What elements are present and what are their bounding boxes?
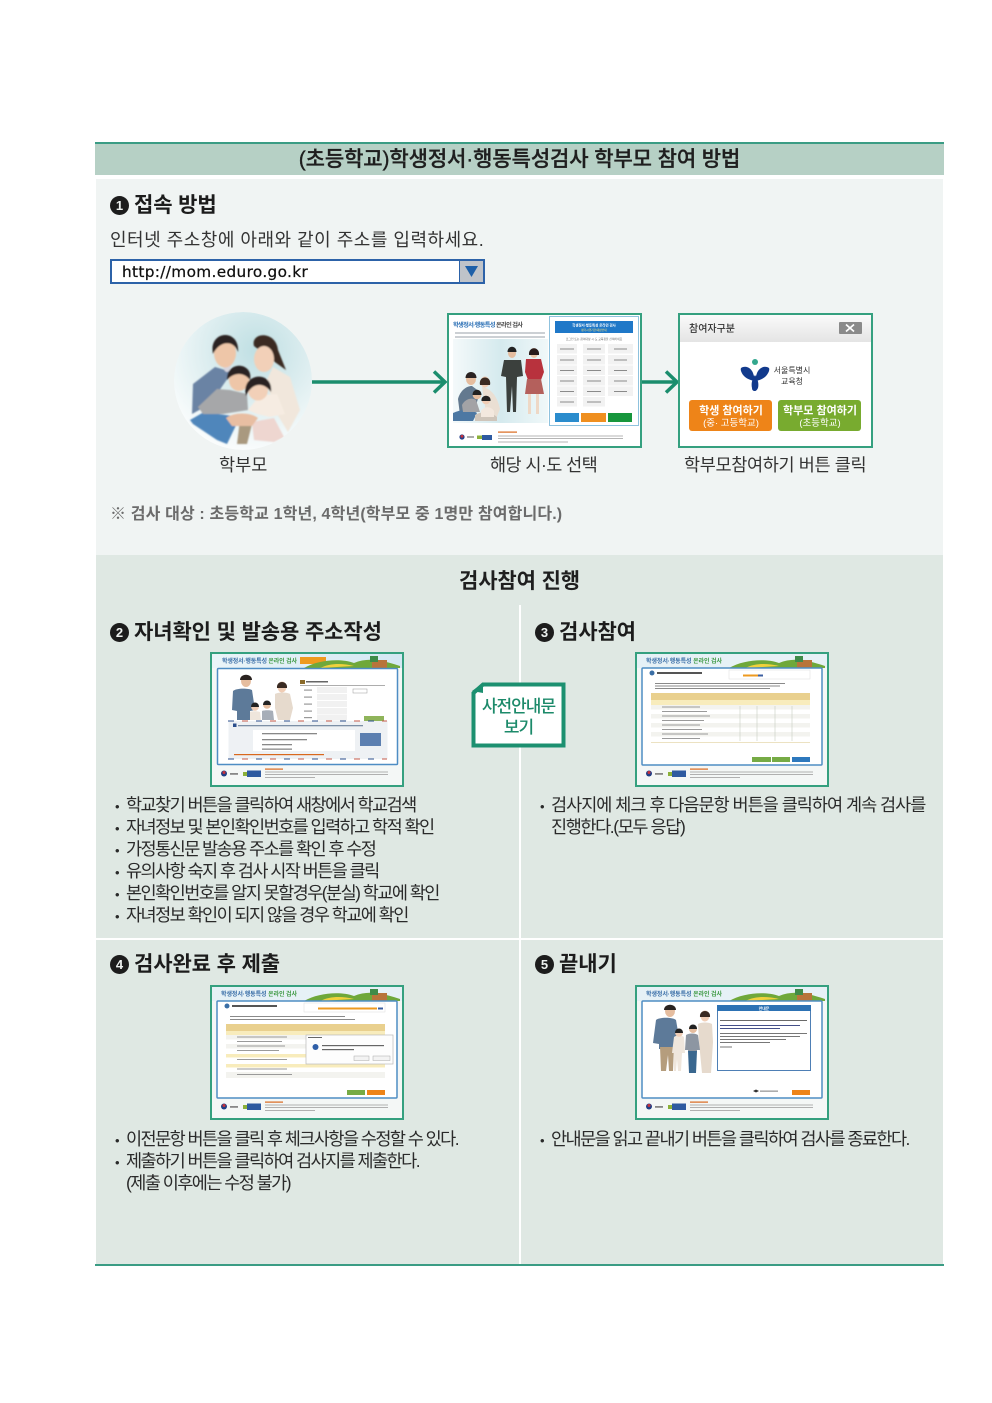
callout text: 보기: [504, 718, 533, 737]
screenshot: participant type: 학부모 참여하기: [783, 403, 857, 417]
caption: select region: 해당 시·도 선택: [490, 455, 597, 475]
list: step 2: 자녀정보 및 본인확인번호를 입력하고 학적 확인: [126, 817, 434, 837]
callout text: 사전안내문: [482, 697, 555, 716]
callout: advance notice: [472, 682, 566, 748]
list: step 4: •: [115, 1155, 120, 1170]
icon: seoul education logo: [741, 359, 769, 391]
screenshot: child confirmation: [210, 652, 404, 787]
list: step 2: 유의사항 숙지 후 검사 시작 버튼을 클릭: [126, 861, 379, 881]
list: step 3: 진행한다.(모두 응답): [551, 817, 684, 837]
footer: [459, 434, 465, 440]
list: step 3: 검사지에 체크 후 다음문항 버튼을 클릭하여 계속 검사를: [551, 795, 925, 815]
list: step 2: 학교찾기 버튼을 클릭하여 새창에서 학교검색: [126, 795, 416, 815]
list: step 2: •: [115, 909, 120, 924]
icon: dropdown: [459, 261, 483, 282]
family: [232, 675, 293, 720]
divider: [519, 605, 521, 1265]
list: step 5: •: [540, 1133, 545, 1148]
address bar: [110, 259, 485, 284]
list: step 2: •: [115, 821, 120, 836]
screenshot: participant type: 서울특별시: [774, 365, 810, 375]
screenshot: participant type: [678, 313, 873, 448]
screenshot: participant type: (초등학교): [799, 418, 841, 429]
heading: step 1: 접속 방법: [134, 194, 217, 217]
panel: connection method: [96, 179, 943, 555]
screenshot: region select: 평가시행기간/대상안내: [581, 328, 607, 332]
screenshot: child confirmation: 학생정서·행동특성 온라인 검사: [222, 657, 297, 665]
heading: step 3: 검사참여: [559, 621, 636, 644]
students: [501, 360, 523, 412]
bottom rule: [95, 1264, 944, 1266]
list: step 4: 제출하기 버튼을 클릭하여 검사지를 제출한다.: [126, 1151, 419, 1171]
arrow: parent to region: [312, 370, 447, 394]
heading: step 2: 자녀확인 및 발송용 주소작성: [134, 621, 382, 644]
screenshot: participant type: 참여자구분: [689, 323, 735, 335]
list: step 4: (제출 이후에는 수정 불가): [126, 1173, 290, 1193]
list: step 2: •: [115, 799, 120, 814]
button: student: [689, 400, 772, 431]
caption: click button: 학부모참여하기 버튼 클릭: [684, 455, 866, 475]
screenshot: submit: 학생정서·행동특성 온라인 검사: [221, 990, 297, 998]
screenshot: finish: [635, 985, 829, 1120]
url text: http://mom.eduro.go.kr: [122, 263, 308, 281]
heading: step 4: 검사완료 후 제출: [134, 953, 280, 976]
screenshot: finish: 안내문: [759, 1006, 770, 1011]
notice box: [718, 1006, 810, 1070]
note: ※ 검사 대상 : 초등학교 1학년, 4학년(학부모 중 1명만 참여합니다.): [110, 506, 562, 523]
title band: [95, 142, 944, 175]
caption: parent: 학부모: [219, 455, 267, 475]
screenshot: submit: [210, 985, 404, 1120]
button: parent: [778, 400, 861, 431]
screenshot: finish: 학생정서·행동특성 온라인 검사: [646, 990, 722, 998]
heading: step 4: 4: [116, 957, 123, 972]
screenshot: test page: 학생정서·행동특성 온라인 검사: [646, 657, 722, 665]
list: step 3: •: [540, 799, 545, 814]
region panel: [550, 316, 638, 426]
list: step 4: 이전문항 버튼을 클릭 후 체크사항을 수정할 수 있다.: [126, 1129, 458, 1149]
screenshot: participant type: 교육청: [781, 377, 803, 386]
title: (초등학교)학생정서·행동특성검사 학부모 참여 방법: [299, 148, 740, 171]
instruction text: 인터넷 주소창에 아래와 같이 주소를 입력하세요.: [110, 230, 484, 250]
list: step 4: [115, 1129, 458, 1193]
heading: step 3: 3: [541, 625, 548, 640]
address box: [228, 721, 388, 759]
list: step 2: •: [115, 865, 120, 880]
footer: [221, 770, 227, 776]
screenshot: participant type: (중· 고등학교): [703, 418, 759, 429]
screenshot: participant type: 학생 참여하기: [699, 403, 763, 417]
list: step 5: 안내문을 읽고 끝내기 버튼을 클릭하여 검사를 종료한다.: [551, 1129, 909, 1149]
family: [458, 386, 480, 415]
heading: step 1: 1: [116, 198, 123, 213]
icon: family photo: [180, 312, 312, 450]
list: step 4: •: [115, 1133, 120, 1148]
screenshot: test page: [635, 652, 829, 787]
heading: step 5: 5: [541, 957, 548, 972]
list: step 2: 본인확인번호를 알지 못할경우(분실) 학교에 확인: [126, 883, 439, 903]
dialog: [306, 1035, 393, 1064]
heading: test progress: 검사참여 진행: [459, 570, 580, 593]
panel: test progress: [96, 555, 943, 1265]
heading: step 2: 2: [116, 625, 123, 640]
family: [653, 1018, 680, 1049]
callout text: [482, 697, 556, 737]
screenshot: region select: [447, 313, 642, 448]
arrow: region to button: [642, 370, 678, 394]
heading: step 5: 끝내기: [559, 953, 617, 976]
screenshot: region select: 학생정서·행동특성 온라인 검사: [453, 321, 523, 329]
list: step 2: 가정통신문 발송용 주소를 확인 후 수정: [126, 839, 375, 859]
list: step 2: 자녀정보 확인이 되지 않을 경우 학교에 확인: [126, 905, 408, 925]
list: step 3: [540, 795, 926, 837]
form: [300, 680, 305, 684]
list: step 2: [115, 795, 439, 925]
list: step 2: •: [115, 887, 120, 902]
screenshot: region select: 학생정서·행동특성 온라인 검사: [572, 322, 617, 328]
screenshot: region select: 로그인 또는 참여대상 시·도 교육청을 선택하세요: [566, 337, 623, 341]
list: step 2: •: [115, 843, 120, 858]
